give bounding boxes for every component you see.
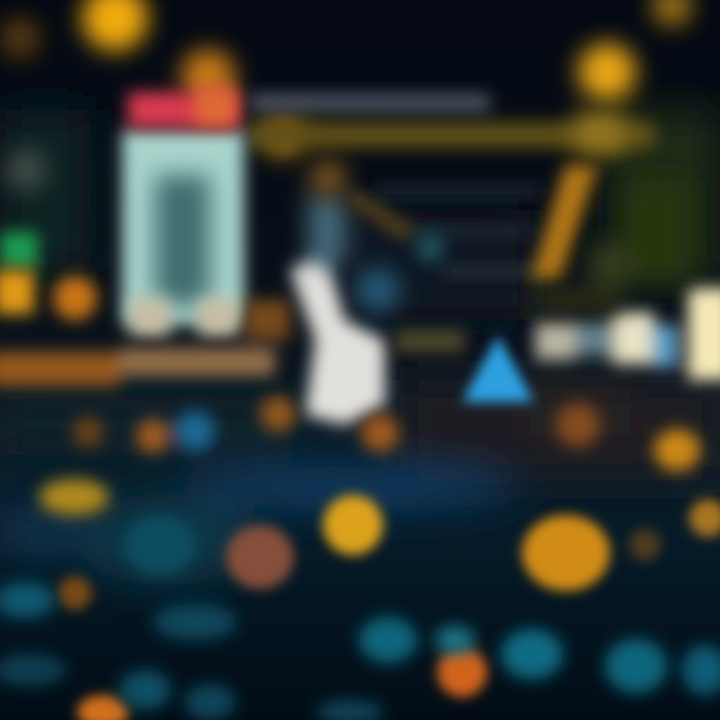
teal bubbles xyxy=(0,515,720,720)
amber ledge xyxy=(0,300,290,386)
lower lanterns xyxy=(58,495,720,720)
background glow regions xyxy=(0,110,720,585)
diagonal amber strut xyxy=(530,165,598,280)
left signals xyxy=(0,150,97,320)
central white figure xyxy=(290,160,465,425)
overhead sign and beam xyxy=(250,93,655,277)
right foliage xyxy=(530,180,690,310)
blue tent xyxy=(462,335,534,402)
mid row lights xyxy=(39,396,700,515)
building with red roof xyxy=(122,85,244,336)
top lanterns xyxy=(0,0,692,157)
right bright windows xyxy=(535,288,720,380)
